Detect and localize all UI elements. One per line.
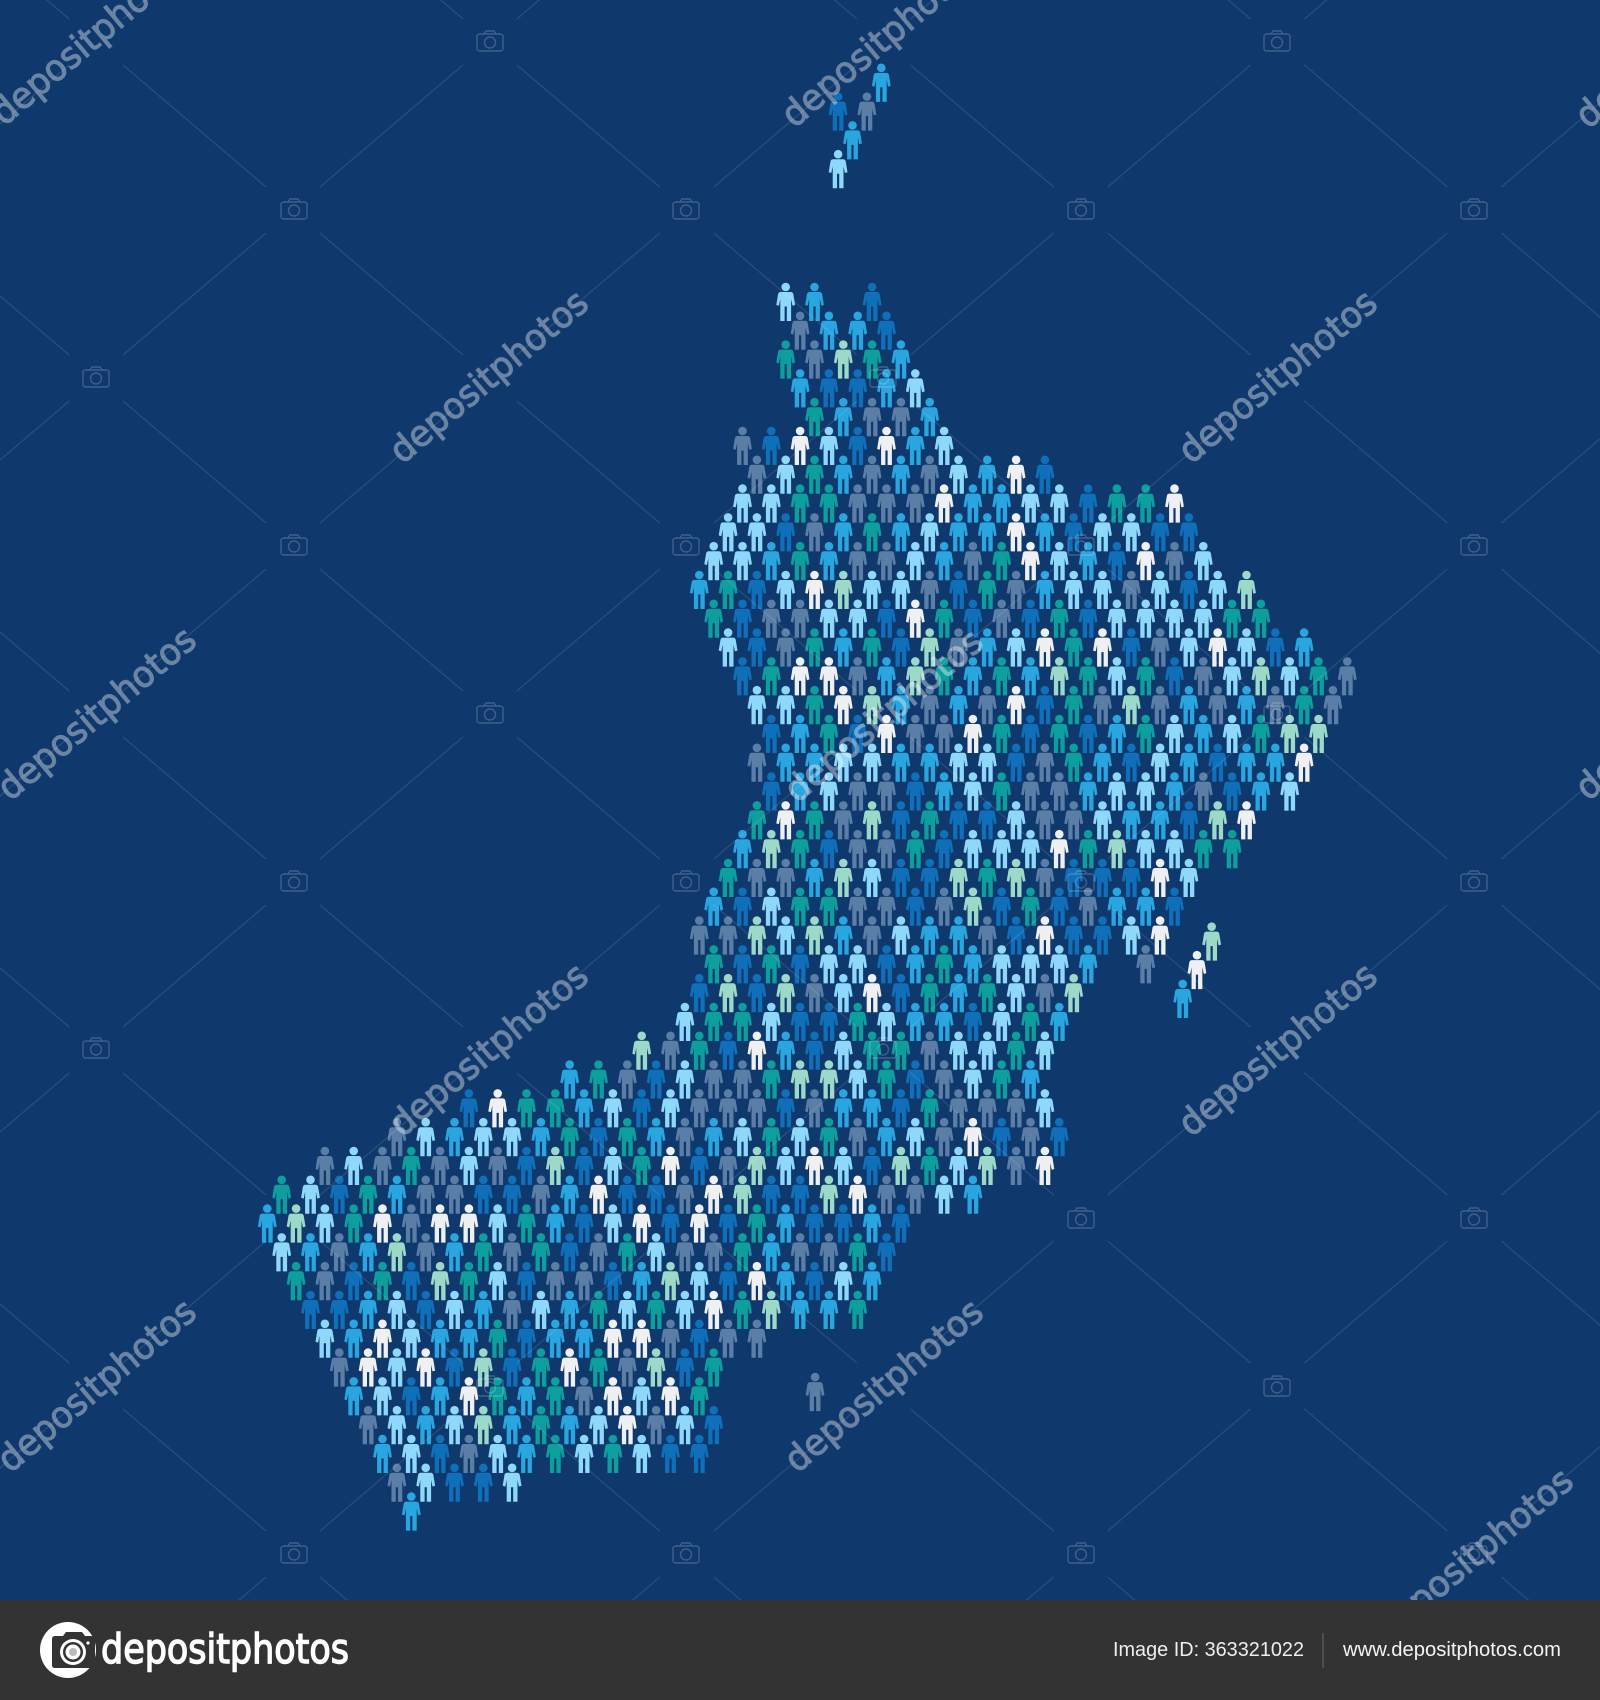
diagonal watermark text: depositphotos [1367, 1460, 1581, 1650]
diagonal watermark text: depositphotos [777, 1291, 991, 1481]
watermark camera icons [83, 31, 1487, 1563]
image id: Image ID: 363321022 [1113, 1639, 1304, 1661]
northern islands figures [829, 64, 891, 188]
logo wordmark: depositphotos [101, 1625, 349, 1673]
diagonal watermark text: depositphotos [1171, 282, 1385, 472]
diagonal watermark text: depositphotos [382, 955, 596, 1145]
website url: www.depositphotos.com [1342, 1639, 1561, 1661]
northern tip figures [776, 283, 939, 436]
footer bar [0, 1600, 1600, 1700]
diagonal watermark text: depositphotos [1171, 955, 1385, 1145]
northern body figures [690, 427, 1357, 1012]
southern body figures [258, 1003, 1069, 1531]
southern lone island figure [806, 1373, 824, 1411]
icon: camera logo [40, 1622, 96, 1678]
diagonal watermark text: depositphotos [382, 282, 596, 472]
eastern islands figures [1173, 922, 1221, 1018]
diagonal watermark text: depositphotos [777, 621, 991, 811]
people map of Oman [258, 64, 1357, 1531]
